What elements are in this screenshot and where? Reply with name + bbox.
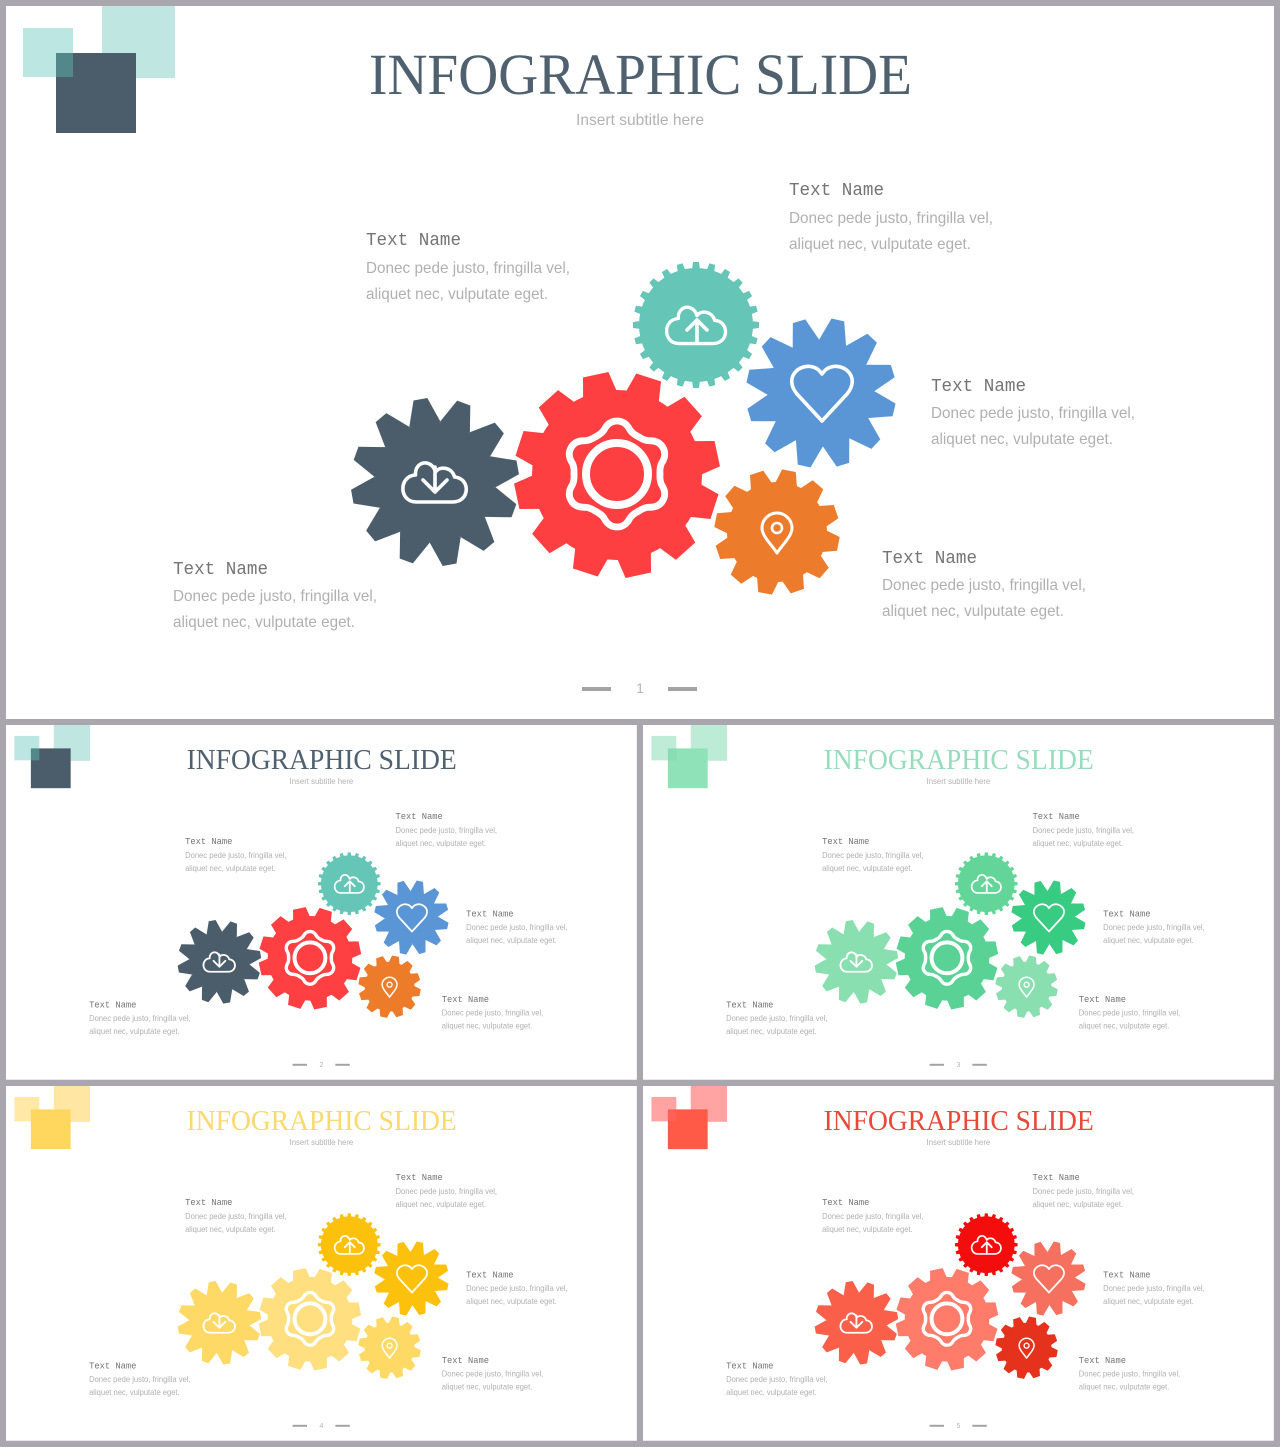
text block: lower left: Donec pede justo, fringilla vel,	[726, 1375, 828, 1384]
text block: lower right: Donec pede justo, fringilla vel,	[1079, 1009, 1180, 1018]
title: INFOGRAPHIC SLIDE	[187, 744, 457, 776]
text block: top left: Donec pede justo, fringilla vel,	[822, 851, 924, 860]
text block: top right: Donec pede justo, fringilla vel,	[396, 826, 497, 835]
text block: lower left	[173, 560, 377, 631]
subtitle: Insert subtitle here	[290, 777, 354, 786]
gear: settings	[886, 898, 1007, 1019]
text block: top left: aliquet nec, vulputate eget.	[822, 864, 913, 873]
gear: cloud download	[171, 1274, 268, 1371]
text block: right: Text Name	[1103, 1271, 1150, 1281]
text block: right: Text Name	[466, 1271, 513, 1281]
text block: right	[466, 1271, 568, 1306]
gear: location pin	[350, 1308, 429, 1387]
gear: heart	[365, 871, 458, 964]
text block: lower right: Text Name	[1079, 1356, 1126, 1366]
text block: top left: Donec pede justo, fringilla vel,	[185, 1212, 287, 1221]
text block: right	[1103, 910, 1205, 945]
text block: right: aliquet nec, vulputate eget.	[466, 1297, 557, 1306]
title: INFOGRAPHIC SLIDE	[187, 1105, 457, 1137]
gear: cloud download	[338, 385, 532, 579]
text block: top left	[822, 1198, 924, 1234]
gear: heart	[365, 1232, 458, 1325]
text block: top left	[185, 837, 287, 873]
text block: lower right	[442, 995, 543, 1030]
slide 4: yellow palette	[6, 1086, 637, 1441]
gear: heart	[727, 299, 915, 487]
subtitle: Insert subtitle here	[576, 112, 704, 129]
text block: lower left: Text Name	[726, 1001, 773, 1011]
text block: right: Donec pede justo, fringilla vel,	[466, 1284, 568, 1293]
text block: top left	[366, 231, 570, 303]
text block: right: Donec pede justo, fringilla vel,	[466, 923, 568, 932]
gear: cloud upload	[318, 1213, 381, 1276]
gear: location pin	[987, 947, 1066, 1026]
gear: settings	[886, 1259, 1007, 1380]
text block: top right	[789, 181, 993, 253]
page number: 2	[319, 1062, 323, 1069]
gear: location pin	[350, 947, 429, 1026]
slide background	[6, 1086, 637, 1441]
text block: lower right: Text Name	[442, 995, 489, 1005]
page number: 5	[956, 1423, 960, 1430]
text block: top left: Text Name	[366, 231, 461, 251]
page number	[293, 1062, 350, 1069]
text block: lower right: aliquet nec, vulputate eget.	[882, 603, 1064, 620]
text block: lower left: Donec pede justo, fringilla vel,	[89, 1014, 191, 1023]
text block: top left	[822, 837, 924, 873]
gear: heart	[1002, 1232, 1095, 1325]
corner squares	[14, 1086, 90, 1149]
text block: lower left	[89, 1001, 191, 1036]
slide 3: green palette	[643, 725, 1274, 1080]
text block: top right: Donec pede justo, fringilla vel,	[1033, 826, 1134, 835]
text block: top right	[396, 812, 497, 848]
text block: lower right: Donec pede justo, fringilla vel,	[1079, 1370, 1180, 1379]
text block: right: Donec pede justo, fringilla vel,	[1103, 1284, 1205, 1293]
text block: lower right: aliquet nec, vulputate eget.	[1079, 1382, 1169, 1391]
gear: heart	[1002, 871, 1095, 964]
slide background	[6, 6, 1274, 719]
text block: top left: aliquet nec, vulputate eget.	[185, 1225, 276, 1234]
text block: right: Donec pede justo, fringilla vel,	[931, 405, 1135, 422]
text block: lower left	[726, 1362, 828, 1397]
text block: lower right: Text Name	[442, 1356, 489, 1366]
text block: lower left: aliquet nec, vulputate eget.	[89, 1027, 180, 1036]
corner squares	[651, 725, 727, 788]
gear: cloud download	[808, 1274, 905, 1371]
text block: lower left: Text Name	[726, 1362, 773, 1372]
text block: lower right: aliquet nec, vulputate eget.	[442, 1382, 532, 1391]
title: INFOGRAPHIC SLIDE	[824, 744, 1094, 776]
text block: top left: Text Name	[185, 1198, 232, 1208]
text block: lower right	[1079, 995, 1180, 1030]
gear: cloud upload	[955, 1213, 1018, 1276]
text block: lower right: Text Name	[1079, 995, 1126, 1005]
gear: location pin	[987, 1308, 1066, 1387]
corner squares	[14, 725, 90, 788]
text block: lower left	[89, 1362, 191, 1397]
text block: right	[466, 910, 568, 945]
title: INFOGRAPHIC SLIDE	[369, 42, 912, 107]
slide background	[643, 1086, 1274, 1441]
text block: top right: aliquet nec, vulputate eget.	[1033, 839, 1123, 848]
text block: lower right	[442, 1356, 543, 1391]
text block: right: Text Name	[931, 377, 1026, 397]
text block: lower right: aliquet nec, vulputate eget.	[1079, 1021, 1169, 1030]
text block: top left: Donec pede justo, fringilla vel,	[822, 1212, 924, 1221]
gear: cloud upload	[633, 262, 759, 388]
text block: top right: aliquet nec, vulputate eget.	[789, 236, 971, 253]
gear: cloud download	[171, 913, 268, 1010]
text block: right: Text Name	[466, 910, 513, 920]
text block: top left: aliquet nec, vulputate eget.	[366, 286, 548, 303]
gear: cloud upload	[955, 852, 1018, 915]
page number	[930, 1423, 987, 1430]
text block: lower left: aliquet nec, vulputate eget.	[173, 614, 355, 631]
text block: right: aliquet nec, vulputate eget.	[1103, 936, 1194, 945]
page number: 3	[956, 1062, 960, 1069]
text block: top right: Text Name	[396, 1173, 443, 1183]
text block: top right: aliquet nec, vulputate eget.	[1033, 1200, 1123, 1209]
page number	[293, 1423, 350, 1430]
text block: top right	[1033, 1173, 1134, 1209]
text block: top right	[396, 1173, 497, 1209]
text block: right: Donec pede justo, fringilla vel,	[1103, 923, 1205, 932]
text block: top left: Text Name	[185, 837, 232, 847]
gear: settings	[249, 898, 370, 1019]
text block: top right: Text Name	[1033, 1173, 1080, 1183]
text block: lower left: aliquet nec, vulputate eget.	[726, 1388, 817, 1397]
corner squares	[23, 6, 175, 133]
text block: lower right: aliquet nec, vulputate eget.	[442, 1021, 532, 1030]
text block: top left: aliquet nec, vulputate eget.	[185, 864, 276, 873]
text block: top right: Text Name	[789, 181, 884, 201]
text block: top right	[1033, 812, 1134, 848]
slide 5: red palette	[643, 1086, 1274, 1441]
gear: settings	[495, 353, 739, 597]
text block: lower right: Donec pede justo, fringilla vel,	[882, 577, 1086, 594]
text block: right: aliquet nec, vulputate eget.	[1103, 1297, 1194, 1306]
text block: top left: Text Name	[822, 1198, 869, 1208]
text block: right	[931, 377, 1135, 448]
text block: lower left: aliquet nec, vulputate eget.	[726, 1027, 817, 1036]
text block: top right: aliquet nec, vulputate eget.	[396, 1200, 486, 1209]
text block: top left: Donec pede justo, fringilla vel,	[185, 851, 287, 860]
text block: lower right: Donec pede justo, fringilla vel,	[442, 1370, 543, 1379]
page number	[582, 680, 697, 696]
text block: lower left: Text Name	[89, 1001, 136, 1011]
text block: top right: Text Name	[396, 812, 443, 822]
text block: right: Text Name	[1103, 910, 1150, 920]
slide background	[643, 725, 1274, 1080]
text block: lower right	[882, 549, 1086, 620]
subtitle: Insert subtitle here	[290, 1138, 354, 1147]
text block: top right: aliquet nec, vulputate eget.	[396, 839, 486, 848]
text block: top left: Donec pede justo, fringilla vel,	[366, 260, 570, 277]
slide 2: dark palette small	[6, 725, 637, 1080]
page number: 4	[319, 1423, 323, 1430]
text block: top right: Donec pede justo, fringilla vel,	[1033, 1187, 1134, 1196]
text block: lower right: Text Name	[882, 549, 977, 569]
text block: lower left: Text Name	[173, 560, 268, 580]
text block: lower left: Donec pede justo, fringilla vel,	[89, 1375, 191, 1384]
text block: lower right: Donec pede justo, fringilla vel,	[442, 1009, 543, 1018]
subtitle: Insert subtitle here	[927, 1138, 991, 1147]
gear: cloud upload	[318, 852, 381, 915]
slide 1: main dark palette	[6, 6, 1274, 719]
text block: right: aliquet nec, vulputate eget.	[466, 936, 557, 945]
gear: settings	[249, 1259, 370, 1380]
corner squares	[651, 1086, 727, 1149]
text block: top right: Text Name	[1033, 812, 1080, 822]
text block: right: aliquet nec, vulputate eget.	[931, 431, 1113, 448]
text block: lower left: Donec pede justo, fringilla vel,	[726, 1014, 828, 1023]
text block: top left	[185, 1198, 287, 1234]
text block: lower left	[726, 1001, 828, 1036]
text block: right	[1103, 1271, 1205, 1306]
gear: location pin	[698, 453, 856, 611]
text block: top left: aliquet nec, vulputate eget.	[822, 1225, 913, 1234]
gear: cloud download	[808, 913, 905, 1010]
slide background	[6, 725, 637, 1080]
text block: lower left: aliquet nec, vulputate eget.	[89, 1388, 180, 1397]
text block: lower left: Donec pede justo, fringilla vel,	[173, 588, 377, 605]
page number: 1	[636, 680, 644, 696]
text block: lower right	[1079, 1356, 1180, 1391]
text block: top right: Donec pede justo, fringilla vel,	[396, 1187, 497, 1196]
page number	[930, 1062, 987, 1069]
text block: top left: Text Name	[822, 837, 869, 847]
text block: lower left: Text Name	[89, 1362, 136, 1372]
subtitle: Insert subtitle here	[927, 777, 991, 786]
text block: top right: Donec pede justo, fringilla vel,	[789, 210, 993, 227]
title: INFOGRAPHIC SLIDE	[824, 1105, 1094, 1137]
